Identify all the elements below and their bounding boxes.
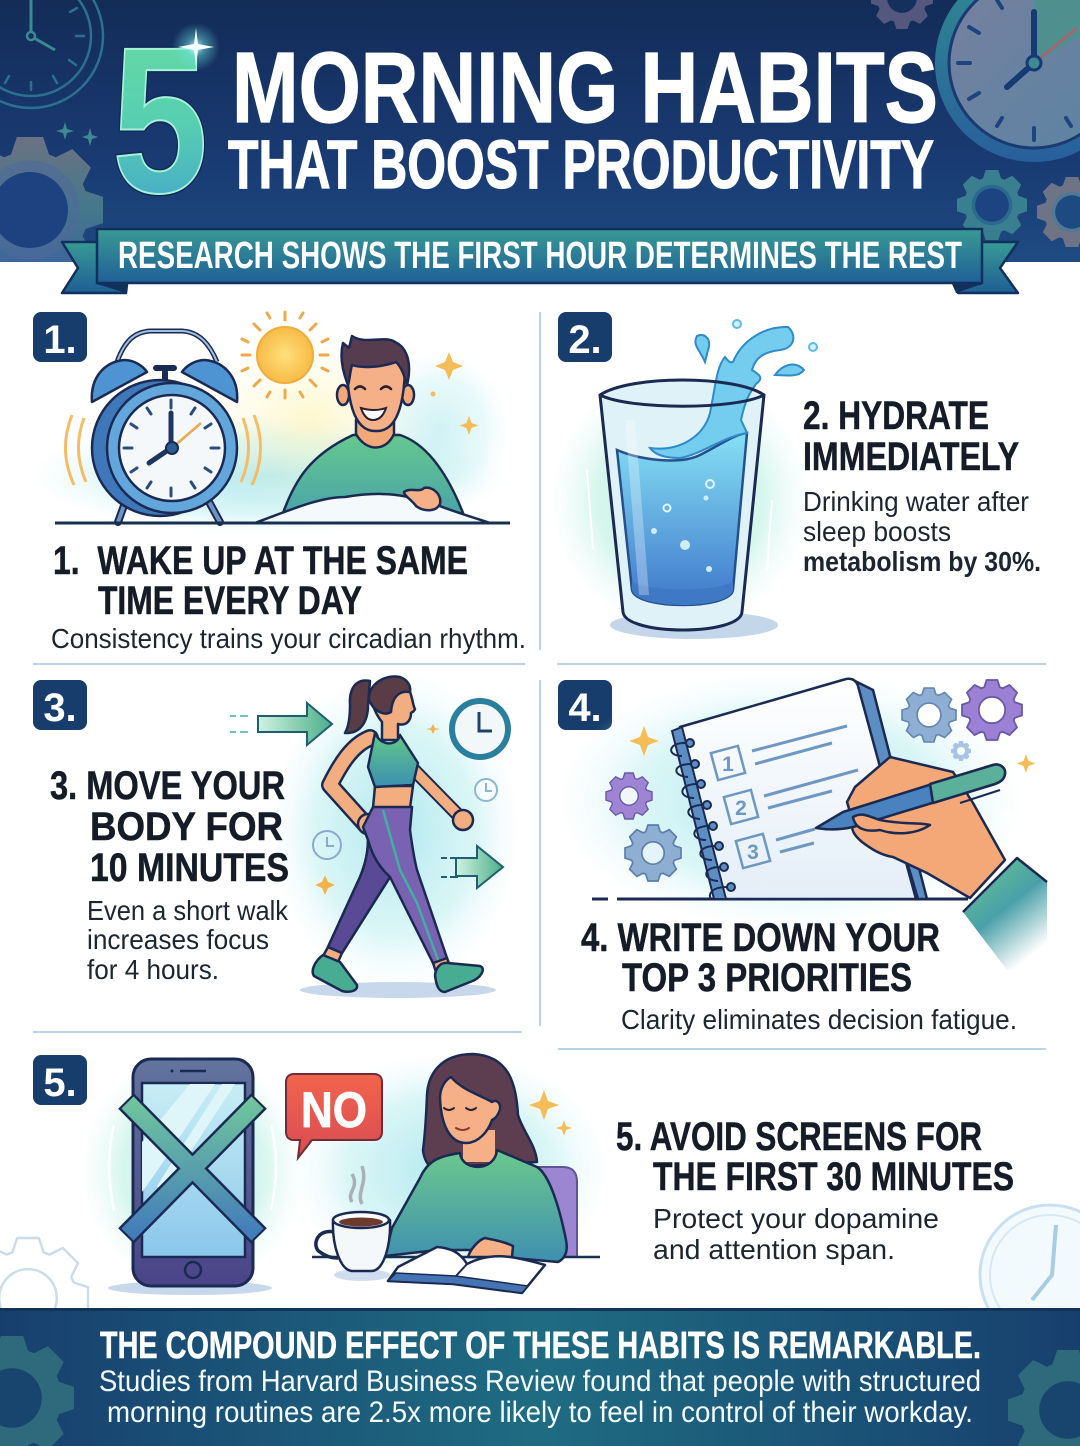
icon: coffee cup (316, 1166, 390, 1281)
icon: reading woman (312, 1054, 600, 1293)
number badge 5: 5. (43, 1061, 77, 1105)
body text 5: Protect your dopamine (653, 1203, 939, 1234)
body text 5 (653, 1203, 939, 1265)
footer gears (0, 1336, 1080, 1446)
panel: habit 3 (33, 670, 520, 998)
heading 3 (50, 764, 289, 890)
number badge 3: 3. (43, 686, 77, 730)
icon: arrows (230, 703, 503, 888)
body text 3: increases focus (87, 924, 269, 955)
body text 3 (87, 895, 289, 985)
illustration glow (81, 1052, 610, 1288)
body text 5: and attention span. (653, 1234, 895, 1265)
icon: NO speech bubble: NO (301, 1082, 367, 1138)
footer body: Studies from Harvard Business Review found that people with structured (99, 1365, 981, 1398)
heading 1 (53, 539, 468, 623)
heading 1: 1. WAKE UP AT THE SAME (53, 539, 468, 583)
heading 2: IMMEDIATELY (803, 435, 1019, 479)
number badge 5 (33, 1055, 87, 1105)
number badge 3 (33, 680, 87, 730)
panel: habit 5 (0, 1052, 1080, 1308)
heading 4 (581, 916, 940, 1000)
body text 2: metabolism by 30%. (803, 546, 1041, 577)
clock: top right decoration (935, 0, 1080, 162)
body text 3: Even a short walk (87, 895, 289, 926)
icon: clocks (313, 701, 508, 895)
illustration glow (30, 330, 510, 535)
illustration glow (550, 370, 810, 630)
number badge 2 (558, 312, 612, 362)
number badge 4: 4. (568, 686, 602, 730)
title: big number 5: 5 (112, 5, 208, 237)
heading 5 (616, 1115, 1014, 1199)
icon: water glass (587, 320, 817, 639)
body text 1: Consistency trains your circadian rhythm. (51, 623, 526, 654)
icon: notebook (592, 679, 968, 899)
heading 4: TOP 3 PRIORITIES (622, 956, 912, 1000)
heading 2 (803, 394, 1019, 479)
body text 2: sleep boosts (803, 516, 951, 547)
body text 2: Drinking water after (803, 486, 1029, 517)
icon: alarm clock (65, 331, 261, 522)
icon: notebook: 3 (747, 841, 759, 864)
body text 4: Clarity eliminates decision fatigue. (621, 1004, 1017, 1035)
gears: right decorations (871, 0, 1080, 247)
ribbon banner (62, 229, 1018, 293)
icon: notebook: 1 (722, 753, 734, 776)
panel: habit 1 (30, 312, 526, 654)
number badge 1: 1. (43, 318, 77, 362)
icon: notebook: 2 (735, 797, 747, 820)
icon: NO speech bubble (286, 1074, 382, 1158)
illustration glow (270, 670, 520, 990)
icon: crossed out phone (108, 1059, 276, 1295)
gear: left decoration (0, 137, 103, 262)
icon: gears (606, 680, 1036, 881)
body text 3: for 4 hours. (87, 954, 219, 985)
heading 2: 2. HYDRATE (803, 394, 989, 438)
icon: walking woman (300, 676, 496, 998)
clock: top left decoration (0, 0, 103, 108)
heading 3: 3. MOVE YOUR (50, 764, 285, 808)
panel: habit 4 (555, 670, 1047, 1035)
title: main heading (228, 32, 938, 203)
dividers (33, 312, 1046, 1049)
heading 4: 4. WRITE DOWN YOUR (581, 916, 940, 960)
heading 3: 10 MINUTES (90, 846, 289, 890)
footer banner (0, 1308, 1080, 1446)
panel: habit 2 (550, 312, 1041, 639)
heading 1: TIME EVERY DAY (98, 579, 362, 623)
footer body (99, 1365, 981, 1429)
sparkles (56, 122, 98, 146)
title: big number 5: 5 (112, 5, 208, 237)
footer body: morning routines are 2.5x more likely to feel in control of their workday. (107, 1396, 973, 1429)
decorative outline gear and clock (0, 1205, 1080, 1358)
icon: waking man (55, 336, 510, 523)
heading 5: 5. AVOID SCREENS FOR (616, 1115, 982, 1159)
icon: sun (242, 312, 328, 398)
body text 2 (803, 486, 1041, 577)
header background (0, 0, 1080, 283)
number badge 4 (558, 680, 612, 730)
icon: hand with pen (816, 757, 1047, 970)
number badge 1 (33, 312, 87, 362)
number badge 2: 2. (568, 318, 602, 362)
illustration glow (555, 670, 1025, 930)
heading 3: BODY FOR (90, 805, 283, 849)
